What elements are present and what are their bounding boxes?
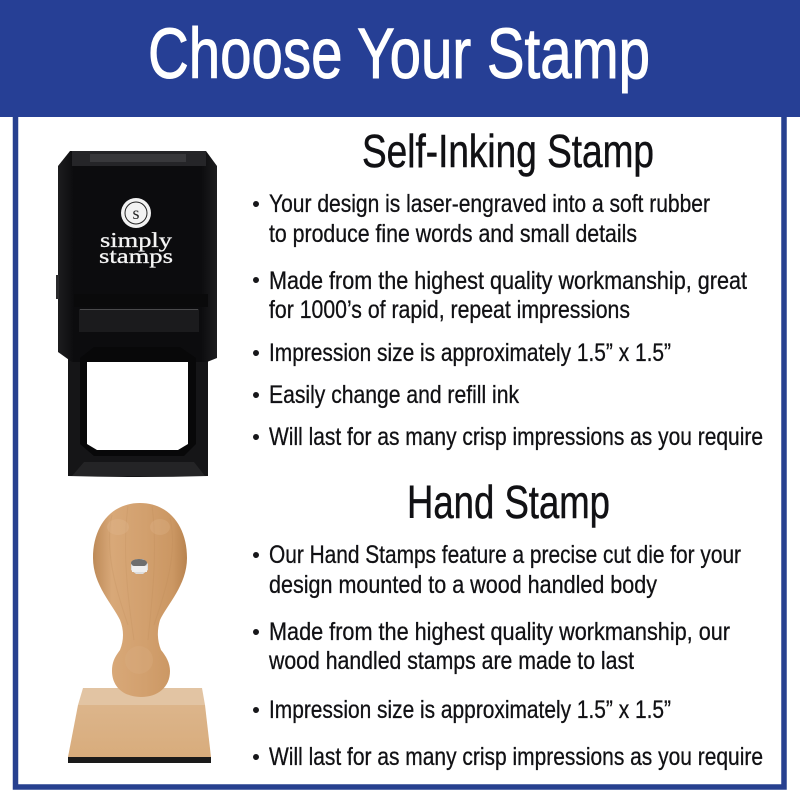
list: hand stamp features: Impression size is approximately 1.5” x 1.5”	[269, 696, 671, 724]
list: self-inking stamp features	[253, 190, 763, 451]
icon: self-inking stamp	[56, 151, 217, 477]
title banner: Choose Your Stamp	[148, 15, 650, 94]
logo on stamp: simply	[100, 228, 173, 252]
logo on stamp	[99, 198, 173, 268]
list: self-inking stamp features: Easily change and refill ink	[269, 381, 519, 409]
logo on stamp: s	[132, 203, 140, 223]
list: hand stamp features: Made from the highest quality workmanship, our	[269, 618, 730, 646]
logo on stamp: stamps	[99, 244, 173, 268]
list: hand stamp features	[253, 541, 763, 771]
list: hand stamp features: design mounted to a wood handled body	[269, 571, 657, 599]
icon: hand stamp	[68, 503, 211, 763]
heading: self-inking stamp: Self-Inking Stamp	[362, 125, 654, 177]
heading: hand stamp: Hand Stamp	[407, 476, 610, 528]
list: self-inking stamp features: to produce fine words and small details	[269, 220, 637, 248]
list: self-inking stamp features: Impression size is approximately 1.5” x 1.5”	[269, 339, 671, 367]
list: self-inking stamp features: for 1000’s of rapid, repeat impressions	[269, 296, 630, 324]
title banner	[0, 0, 800, 117]
stamp window	[87, 362, 188, 450]
list: hand stamp features: wood handled stamps are made to last	[268, 647, 634, 675]
list: self-inking stamp features: Your design is laser-engraved into a soft rubber	[269, 190, 710, 218]
